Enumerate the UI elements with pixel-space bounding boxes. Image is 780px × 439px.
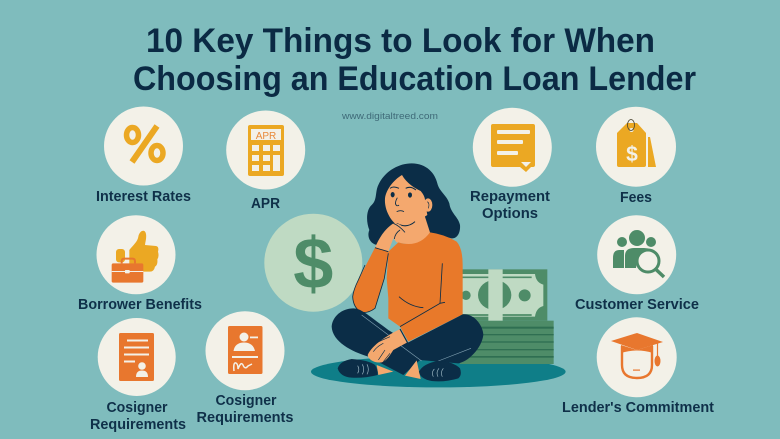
icon: document with person: [119, 333, 154, 381]
title: 10 Key Things to Look for When: [146, 22, 655, 60]
item: cosigner requirements left: Cosigner: [106, 400, 168, 416]
sweater folds: [399, 263, 445, 327]
woman: sweater, legs, hands: [332, 232, 483, 381]
item: cosigner requirements right: [196, 311, 294, 426]
icon: id form with signature: [228, 326, 262, 374]
item: cosigner requirements right: Requirements: [196, 410, 294, 426]
dollar badge: $: [293, 224, 333, 304]
item: interest rates: [96, 106, 191, 205]
item: cosigner requirements left: Requirements: [90, 417, 186, 433]
woman: hand at chin: [375, 223, 405, 252]
item: repayment options: Repayment: [470, 189, 550, 205]
item: cosigner requirements left: [90, 318, 186, 433]
icon: percent: [126, 126, 163, 162]
item: borrower benefits: [78, 215, 202, 313]
website url: www.digitaltreed.com: [341, 111, 438, 122]
item: interest rates: Interest Rates: [96, 189, 191, 205]
item: lender's commitment: Lender's Commitment: [562, 400, 714, 416]
dollar badge: [264, 214, 362, 312]
item: fees: Fees: [620, 190, 652, 206]
item: repayment options: Options: [482, 206, 538, 222]
item: repayment options: [470, 108, 552, 222]
floor shadow: [311, 356, 566, 387]
title: Choosing an Education Loan Lender: [133, 60, 696, 98]
item: borrower benefits: Borrower Benefits: [78, 297, 202, 313]
item: fees: [596, 107, 676, 206]
icon: price tag: $: [626, 143, 638, 166]
woman: upper body: [367, 163, 460, 245]
icon: calculator: APR: [256, 131, 276, 142]
item: APR: [226, 110, 305, 212]
icon: thumbs up and briefcase: [112, 231, 159, 283]
item: APR: APR: [251, 196, 280, 212]
neck: [397, 212, 430, 244]
title: [133, 22, 696, 98]
legs: [332, 308, 483, 375]
facial features: [390, 187, 416, 226]
ankles: [377, 360, 421, 379]
item: customer service: [575, 215, 699, 313]
item: customer service: Customer Service: [575, 297, 699, 313]
raised arm: [353, 248, 388, 312]
icon: note with lines: [491, 124, 535, 172]
item: cosigner requirements right: Cosigner: [216, 393, 277, 409]
ear: [424, 198, 432, 212]
icon: graduate with cap: [611, 333, 663, 378]
lower hand: [368, 329, 407, 363]
hair: [367, 163, 460, 245]
face: [385, 175, 427, 227]
item: lender's commitment: [562, 317, 714, 416]
cash stack: [460, 269, 554, 364]
sweater torso: [387, 232, 463, 342]
shoes: [338, 359, 461, 381]
icon: people with magnifier: [613, 230, 664, 277]
